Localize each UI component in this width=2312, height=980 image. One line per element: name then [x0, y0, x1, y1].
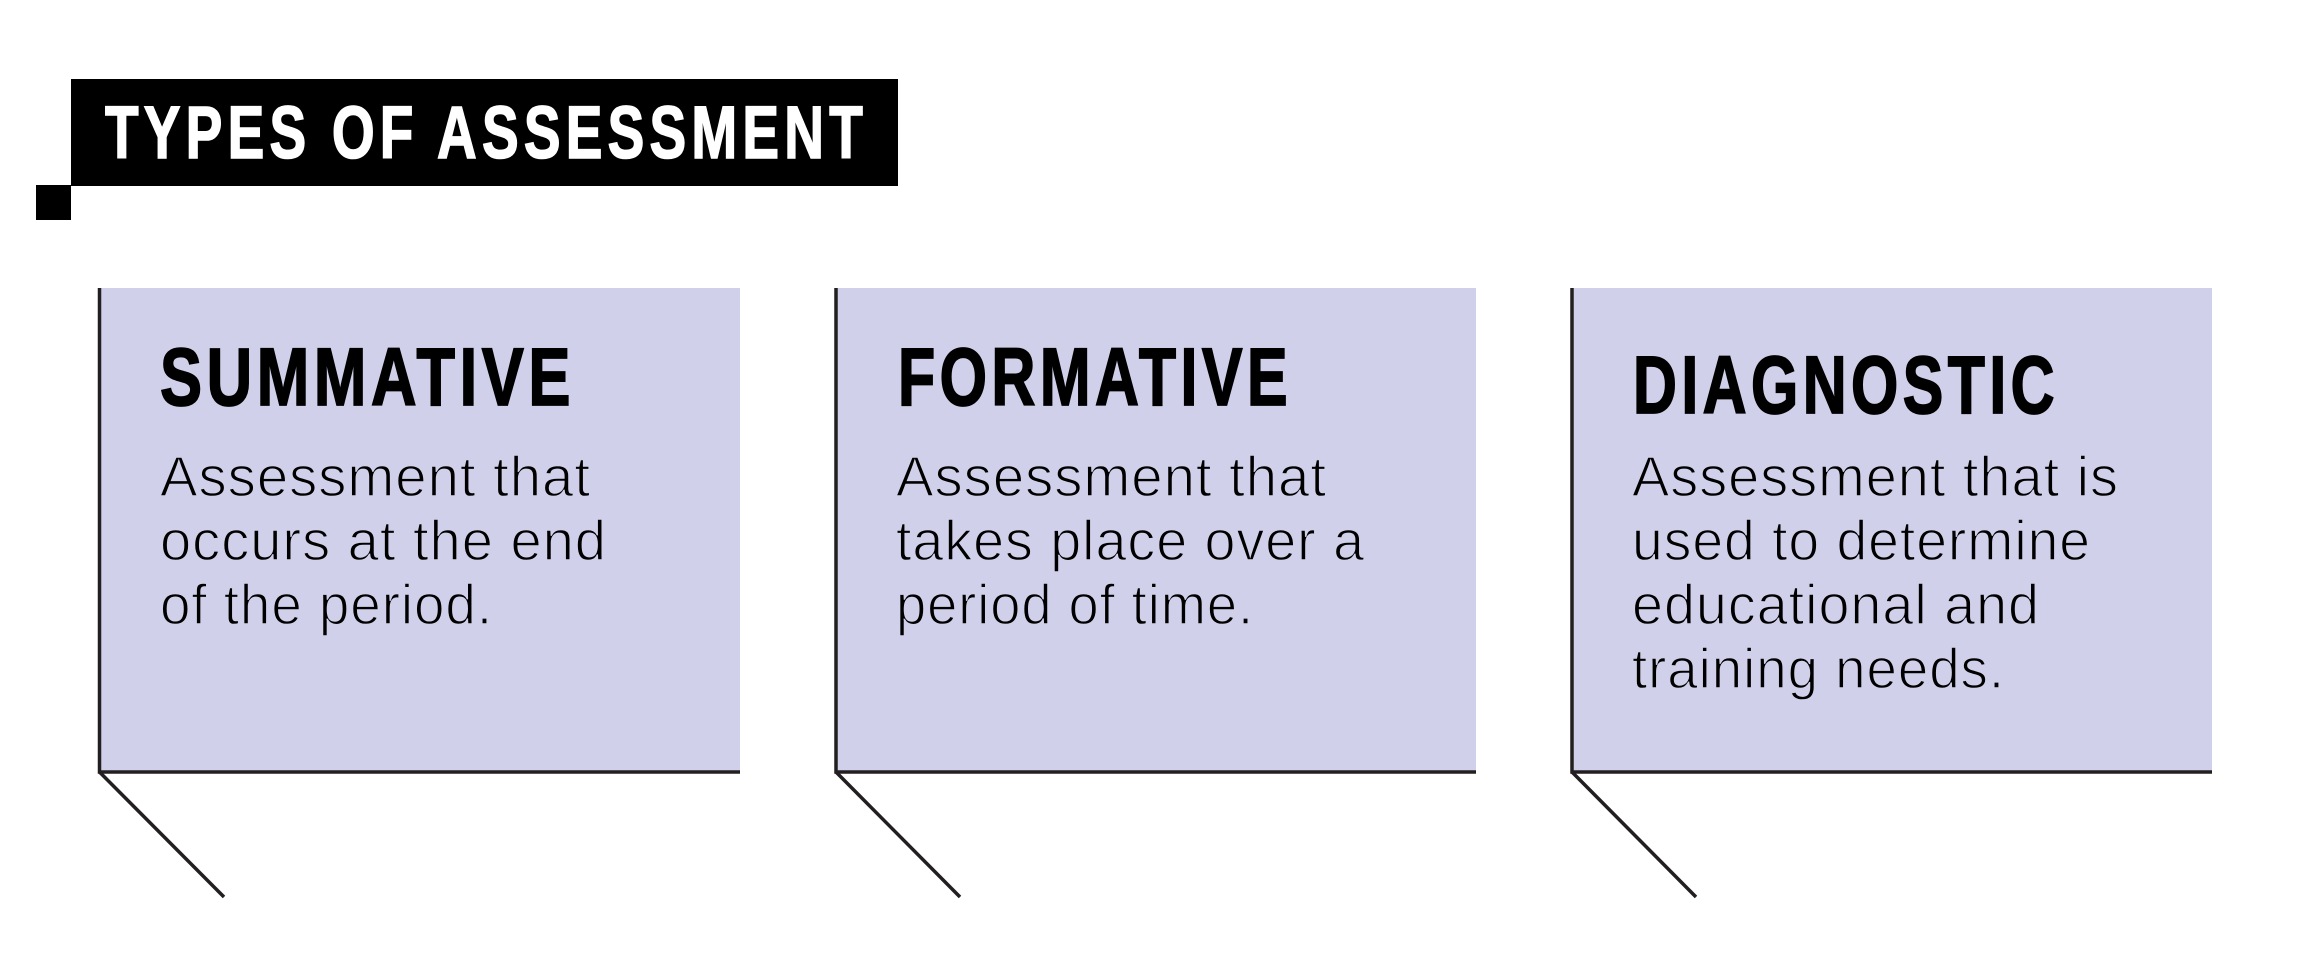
title text: TYPES OF ASSESSMENT: [105, 91, 868, 174]
description: diagnostic: educational and: [1632, 573, 2040, 637]
panel: diagnostic: [1571, 288, 2212, 897]
description: summative: of the period.: [160, 573, 493, 637]
description: formative: period of time.: [896, 573, 1254, 637]
description: summative: [160, 445, 607, 637]
diagonal pointer: formative: [836, 772, 960, 897]
description: diagnostic: [1632, 445, 2119, 701]
description: diagnostic: used to determine: [1632, 509, 2091, 573]
description: summative: occurs at the end: [160, 509, 607, 573]
description: summative: Assessment that: [160, 445, 591, 509]
description: formative: takes place over a: [896, 509, 1365, 573]
panel: formative: [835, 288, 1476, 897]
heading: diagnostic: DIAGNOSTIC: [1633, 340, 2059, 431]
diagonal pointer: summative: [100, 772, 224, 897]
description: diagnostic: Assessment that is: [1632, 445, 2119, 509]
heading: summative: SUMMATIVE: [160, 332, 575, 423]
heading: formative: FORMATIVE: [898, 332, 1292, 423]
title banner: [36, 79, 898, 220]
description: diagnostic: training needs.: [1632, 637, 2005, 701]
description: formative: [896, 445, 1365, 637]
panel: summative: [98, 288, 740, 897]
diagonal pointer: diagnostic: [1572, 772, 1696, 897]
description: formative: Assessment that: [896, 445, 1327, 509]
